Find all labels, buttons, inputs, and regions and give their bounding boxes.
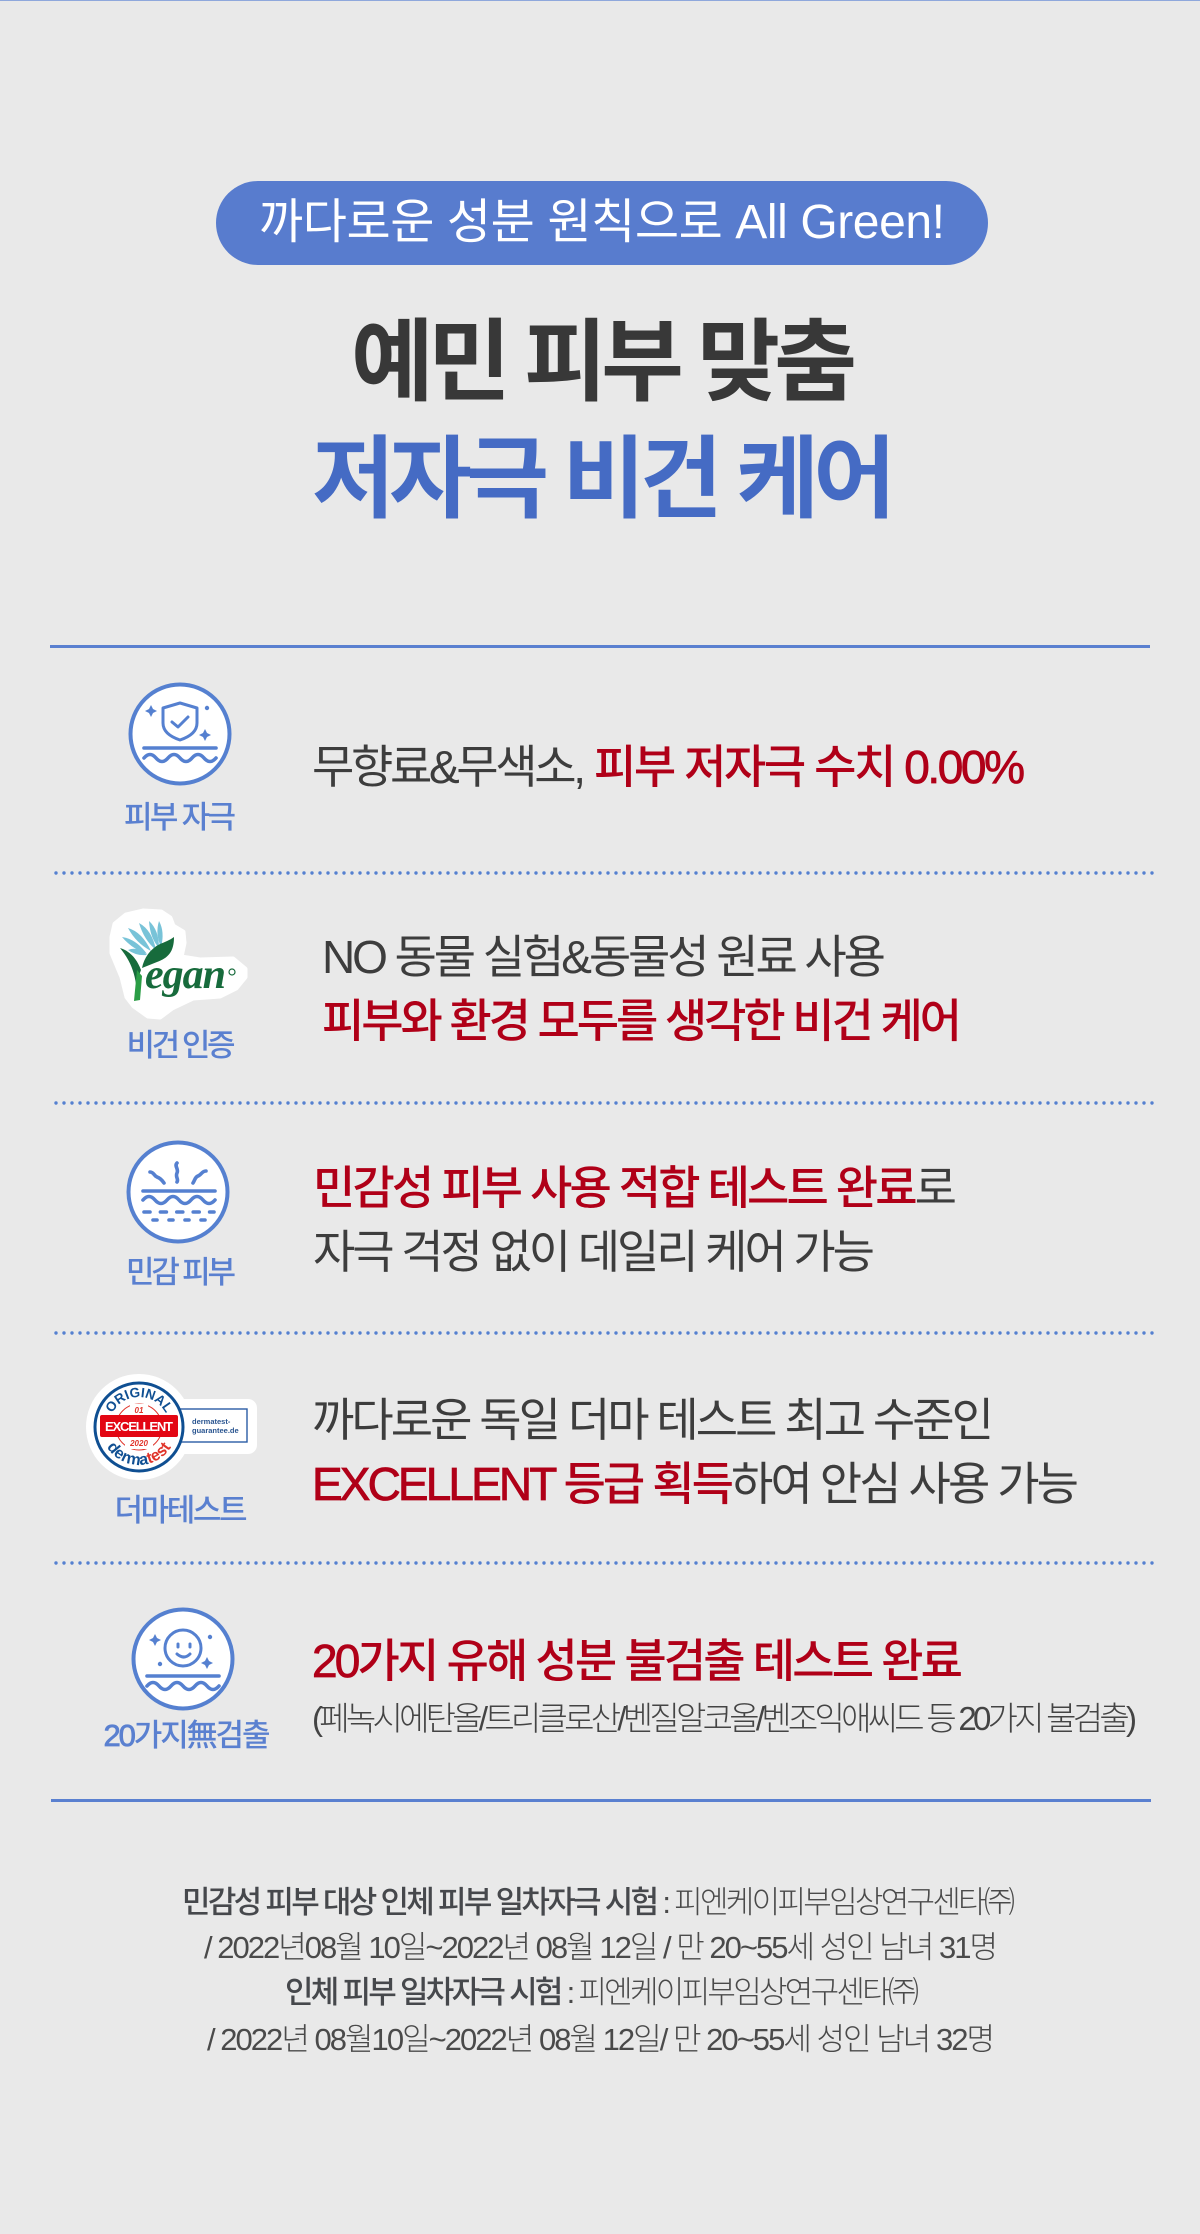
row: sensitive skin xyxy=(126,1142,957,1290)
row: vegan xyxy=(112,911,962,1063)
title: line 1: 예민 피부 맞춤 xyxy=(351,313,857,413)
icon: shield on skin xyxy=(130,684,230,784)
description: 무향료&무색소, xyxy=(312,741,586,793)
row: skin irritation xyxy=(124,684,1025,835)
label: 피부 자극 xyxy=(124,800,236,835)
icon: dermatest seal xyxy=(86,1374,257,1480)
description line 2: EXCELLENT 등급 획득하여 안심 사용 가능 xyxy=(312,1458,1079,1510)
icon: vegan badge: egan xyxy=(145,952,226,998)
icon: smiley on skin xyxy=(134,1610,232,1708)
label: 비건 인증 xyxy=(126,1028,236,1063)
footnote line 3: 인체 피부 일차자극 시험 : 피엔케이피부임상연구센타㈜ xyxy=(285,1975,919,2010)
description xyxy=(312,741,1025,793)
icon: dermatest seal: dermatest- xyxy=(192,1417,231,1426)
icon: dermatest seal: EXCELLENT xyxy=(105,1419,173,1434)
icon: dermatest seal: ORIGINAL xyxy=(106,1388,171,1413)
description line 2: 피부와 환경 모두를 생각한 비건 케어 xyxy=(322,995,962,1047)
icon: dermatest seal: dermatest xyxy=(108,1442,171,1466)
icon: sensitive skin layers xyxy=(128,1142,228,1242)
description line 2: (페녹시에탄올/트리클로산/벤질알코올/벤조익애씨드 등 20가지 불검출) xyxy=(312,1700,1137,1737)
description line 1: NO 동물 실험&동물성 원료 사용 xyxy=(322,931,886,983)
description line 1: 민감성 피부 사용 적합 테스트 완료로 xyxy=(313,1162,957,1214)
description line 2: 자극 걱정 없이 데일리 케어 가능 xyxy=(313,1226,875,1278)
title: line 2: 저자극 비건 케어 xyxy=(312,430,896,530)
footnote line 4: / 2022년 08월10일~2022년 08월 12일/ 만 20~55세 성인 남녀 32명 xyxy=(207,2022,995,2057)
label: 20가지無검출 xyxy=(104,1718,270,1753)
icon: dermatest seal: 2020 xyxy=(129,1439,148,1448)
row: 20 harmful ingredients xyxy=(104,1610,1137,1753)
label: 민감 피부 xyxy=(126,1255,236,1290)
badge: All Green pill xyxy=(216,181,988,265)
row: dermatest xyxy=(86,1374,1079,1528)
description: 피부 저자극 수치 0.00% xyxy=(594,741,1025,793)
icon: dermatest seal: 01 xyxy=(135,1406,144,1415)
label: 더마테스트 xyxy=(114,1493,248,1528)
footnote line 1: 민감성 피부 대상 인체 피부 일차자극 시험 : 피엔케이피부임상연구센타㈜ xyxy=(182,1885,1015,1920)
description line 1: 20가지 유해 성분 불검출 테스트 완료 xyxy=(312,1635,963,1687)
description line 1: 까다로운 독일 더마 테스트 최고 수준인 xyxy=(312,1394,994,1446)
badge: All Green pill: 까다로운 성분 원칙으로 All Green! xyxy=(259,196,945,249)
footnote line 2: / 2022년08월 10일~2022년 08월 12일 / 만 20~55세 성인 남녀 31명 xyxy=(204,1930,998,1965)
icon: dermatest seal: guarantee.de xyxy=(192,1426,239,1435)
footnote xyxy=(182,1885,1015,2057)
icon: vegan badge xyxy=(112,911,245,1017)
